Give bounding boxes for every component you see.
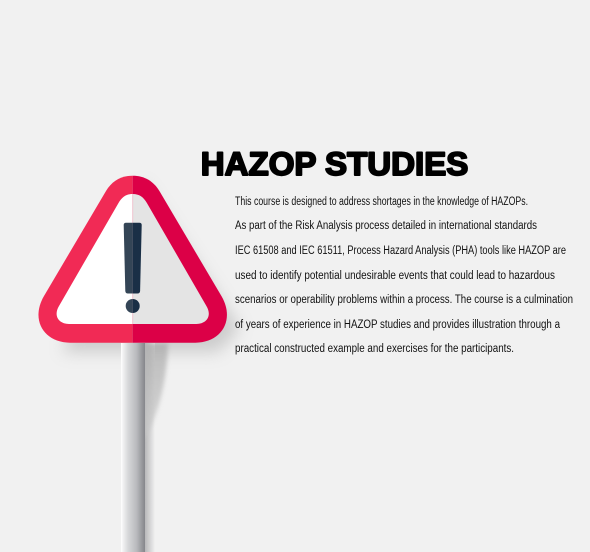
sign inner panel right half (133, 194, 209, 324)
pole cast shadow (145, 343, 168, 552)
body text: As part of the Risk Analysis process detailed in international standards (235, 220, 537, 232)
sign outer frame left half (38, 176, 133, 343)
pole (121, 343, 168, 552)
pole body (121, 343, 145, 552)
sign shadow (62, 182, 240, 352)
sign outer frame right half (133, 176, 227, 343)
title: HAZOP STUDIES (201, 146, 468, 182)
icon: exclamation mark (124, 223, 142, 313)
warning sign (38, 176, 227, 343)
body text (235, 196, 573, 355)
sign inner panel left half (57, 194, 133, 324)
body text: practical constructed example and exercises for the participants. (235, 343, 514, 355)
